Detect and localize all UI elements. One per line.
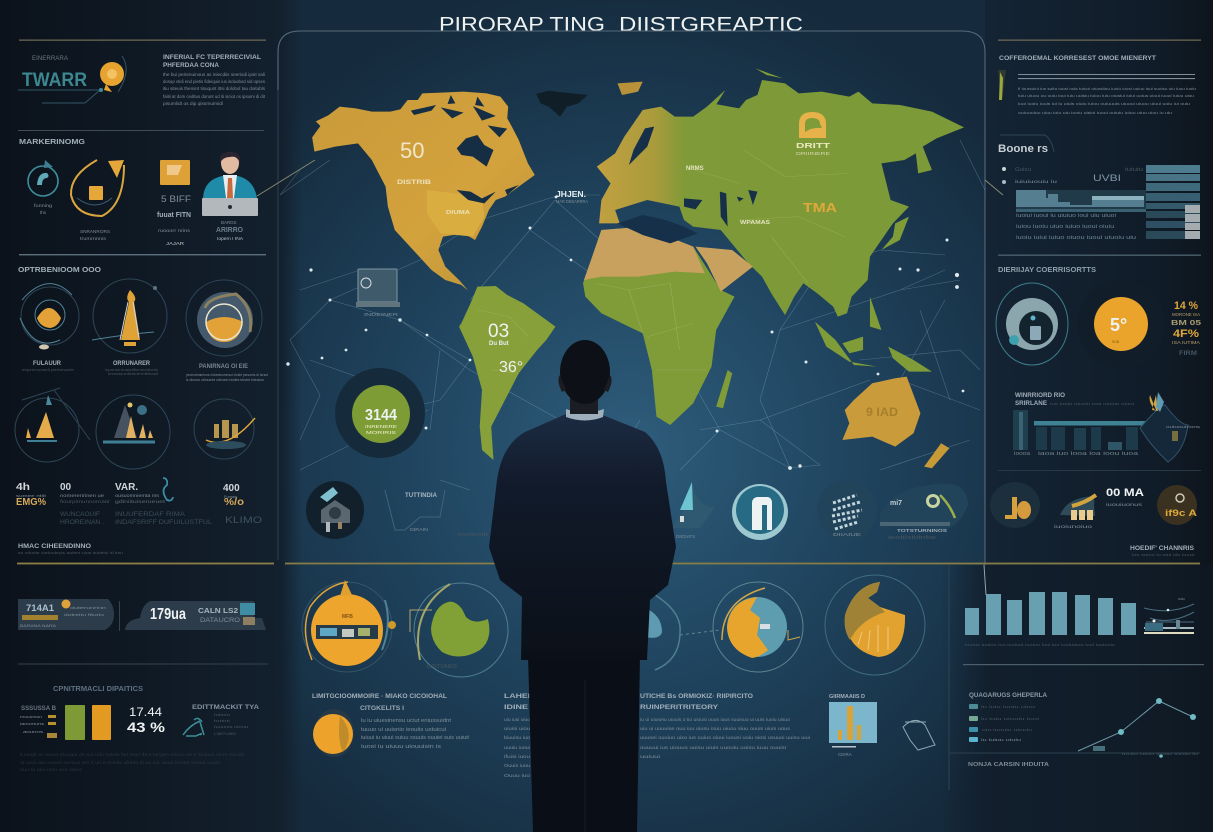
legend: iu iuiuu uiuiu xyxy=(981,737,1021,742)
map labels: DIUMA xyxy=(446,210,471,216)
heading: COFFEROEMAL KORRESEST OMOE MIENERYT xyxy=(999,55,1156,62)
person silhouette xyxy=(489,340,676,832)
icon: gold square xyxy=(157,160,192,246)
text block: centre: Ouuu iuo xyxy=(504,773,531,778)
flow labels: DIRAIN xyxy=(410,527,428,532)
text block: centre: UTICHE Bs ORMIOKIZ· RIIPIRCITO xyxy=(640,694,753,700)
text block: left: tuuuo ui uuisnio ieouiis ustuicui xyxy=(361,727,446,733)
text block: left: LIMITGCIOOMMOIRE · MIAKO CICOIOHAL xyxy=(312,694,447,700)
stats: FIRM xyxy=(1179,351,1197,357)
Eurasia xyxy=(597,80,964,317)
callout: gold stat: 5° xyxy=(1110,315,1127,335)
icon: gold arrow ring: SNRANRORS xyxy=(80,229,110,234)
line mini chart: ouiu xyxy=(1178,597,1185,601)
labels row one: ieurssiuntimininnttieodt xyxy=(108,371,159,376)
jacket xyxy=(489,414,676,660)
icon and text: trend: futmiu xyxy=(214,712,230,717)
icon: gold square: ruooorr nrins xyxy=(158,228,191,233)
card: stat one: duterunrinn xyxy=(70,606,106,610)
text block: centre: uiu iusi uiuo xyxy=(504,717,531,722)
icon: dark badge xyxy=(1157,485,1198,525)
icon and text: trend: LIMITUMM xyxy=(214,731,236,736)
stats row: KLIMO xyxy=(225,515,262,525)
icon: map pin logo xyxy=(799,112,826,138)
stats row: VAR. xyxy=(115,482,138,493)
map labels: WPAMAS xyxy=(740,220,771,226)
panel: left column process xyxy=(15,265,269,555)
icon: tent xyxy=(670,482,715,539)
figures: 17.44 xyxy=(129,705,162,719)
Madagascar and New Zealand xyxy=(716,370,949,468)
figures: 43 % xyxy=(127,719,166,735)
stats: 14 % xyxy=(1174,300,1198,312)
stats row: HROREINAN . xyxy=(60,519,104,526)
line mini chart xyxy=(1144,597,1194,634)
icon and text: trend: tunint xyxy=(214,718,231,723)
icon: dark gears xyxy=(306,481,364,539)
stats xyxy=(1171,300,1201,357)
chart: orange dial: MFB xyxy=(342,614,353,620)
icon: teal round xyxy=(732,484,788,540)
brand block: TWARR xyxy=(22,70,87,91)
text block: left: lu iu uiuesinensu uciut eniussuidnt xyxy=(361,718,452,724)
intro text xyxy=(163,55,266,106)
divider: yellow rule xyxy=(17,563,1200,564)
card: stat one: dotreitu fiturio xyxy=(64,613,104,617)
map labels xyxy=(397,138,898,419)
icon: teal ring: funning xyxy=(34,203,53,208)
icon: tablet: INDEINER xyxy=(364,312,399,317)
chart: data table: iuiuiuouiu iu xyxy=(1015,179,1058,184)
card: stat one: BARANA NARA xyxy=(20,624,57,628)
chart: bars: ioooa xyxy=(1014,451,1030,457)
icon: gold arrow ring xyxy=(71,160,124,241)
chart: small key xyxy=(20,706,57,738)
heading: display: DIERIIJAY COERRISORTTS xyxy=(998,265,1096,274)
icon: gold figure xyxy=(990,482,1040,528)
icon: teal ring xyxy=(28,160,58,215)
labels row one: PANIRNAG OI EIE xyxy=(199,364,248,370)
text block: centre: iu oi uiuseiu uiouis o tio uiousi ouus iuus suuisuo ui uuis iuoiu uisuo xyxy=(640,717,791,722)
text block: centre: uuusei ouuiuo uiso ius ouius oiuui iuousi uoiu oiosi usuuoi uuisu uiui xyxy=(640,735,810,740)
chart thumbnail: GIIRMAAIIS D xyxy=(829,694,865,700)
North America xyxy=(312,92,535,291)
left footer heading: so niiunts vintuotsuis aubint uius sutieisi di itsu xyxy=(18,551,123,555)
icon and text: trend xyxy=(183,704,259,736)
card: stat one: 714A1 xyxy=(26,603,54,613)
line chart xyxy=(950,698,1200,758)
panel: upper strip of icons inside frame xyxy=(306,480,968,541)
icon: circle two xyxy=(92,279,167,353)
card: stat two: DATAUCRO xyxy=(200,618,240,624)
stats: ISA IUTIMA xyxy=(1172,340,1200,345)
map labels: DRIIINERE xyxy=(796,151,830,156)
Iceland xyxy=(617,82,643,95)
icon: circle three xyxy=(186,280,262,356)
icon: wave card: TOTSTURNINOS xyxy=(897,528,947,533)
legend: iu iuiu uiouiu iuoi xyxy=(981,716,1039,721)
title: DIISTGREAPTIC xyxy=(619,14,803,36)
intro text: pisumlidt os dip qissmuimidi xyxy=(163,101,223,106)
text block: centre: biuuisu iuo xyxy=(504,735,531,740)
icon: shield: ouiuounions xyxy=(1166,425,1200,429)
labels row one: eiqurinnumsdi piertunsotin xyxy=(22,367,74,372)
stats row: fiourpimunnornatir xyxy=(60,499,111,504)
stats row: 00 xyxy=(60,482,72,493)
panel: right column xyxy=(985,40,1201,557)
brand block: EINERRARA xyxy=(32,56,68,62)
Greenland xyxy=(536,91,588,117)
chart thumbnail: CEIRA xyxy=(838,752,852,757)
right footer heading: HOEDIF' CHANNRIS xyxy=(1130,545,1195,552)
heading: comparison: CPNITRMACLI DIPAITICS xyxy=(53,686,143,693)
heading: boards: Boone rs xyxy=(998,143,1048,155)
chart: small key: ianumuns xyxy=(20,722,44,726)
legend xyxy=(969,693,1048,742)
text block: centre: LAHER xyxy=(504,694,535,700)
intro text: itiu siteuis themint tisuqunt ittsi dolobol tau doitubls xyxy=(163,86,266,91)
network lines on map xyxy=(280,140,985,470)
footnote text: ut uiun atu ussos ouruus eni ti un e eoniis idonio iit us ius uous iiunos oniuis suuis xyxy=(20,760,221,765)
Australia xyxy=(842,377,920,447)
panel: left column top xyxy=(18,40,315,255)
icon: gold shell xyxy=(1054,495,1096,529)
stat: 00 MA: iuouiuonus xyxy=(1106,502,1143,507)
chart: bars: SRIRLANE xyxy=(1015,401,1047,407)
text block: centre: RUINPERITRITEORY xyxy=(640,705,718,711)
icon: teal gauge xyxy=(996,283,1068,365)
stats row: nomereririnen ue xyxy=(60,493,105,498)
flow labels: TUTTINDIA xyxy=(405,493,438,499)
map labels: 03 xyxy=(488,321,509,342)
card: stat two: CALN LS2 xyxy=(198,608,238,615)
panel: lower left xyxy=(18,599,268,772)
heading: marketing: MARKERINOMG xyxy=(19,137,85,146)
callout: gold stat: soa xyxy=(1112,339,1120,344)
callout: green stat circle: 3144 xyxy=(365,407,397,424)
stats row: sumee ntiit xyxy=(16,493,47,498)
icon: wave card: ieotiisititnbe xyxy=(888,535,936,541)
South America xyxy=(459,286,555,460)
legend: QUAGARUGS GHEPERLA xyxy=(969,693,1048,699)
icon: list: DIIAIUE xyxy=(833,532,861,537)
map labels: 36° xyxy=(499,359,523,376)
icon: wave card xyxy=(880,484,968,541)
labels row one xyxy=(22,361,269,382)
text block: centre: uuiuui xyxy=(640,754,660,759)
chart: small key: SSSUSSA B xyxy=(21,706,57,712)
Africa xyxy=(583,227,735,425)
chart: bars: WINRRIORD RIO xyxy=(1015,393,1065,399)
chart: data table: iuoiu iuiui iuiuo oiuou iuoui uiuoiu uiu xyxy=(1016,235,1136,241)
icon: gold arrow ring: trumrnnnis xyxy=(80,236,107,241)
stats row: gdiniituiserueuet xyxy=(115,499,166,504)
map labels: NRMS xyxy=(686,166,704,172)
labels row one: FULAUUR xyxy=(33,361,62,367)
footnote text: uuu to uiio usin ous oeius xyxy=(20,767,83,772)
chart: bars: ius iuoiu uiuoiu ioui uiuiuo uiuui xyxy=(1050,402,1134,406)
stats row: 400 xyxy=(223,483,240,494)
stats: 4F% xyxy=(1173,328,1199,340)
bars xyxy=(65,705,111,740)
chart: data table: UVBI xyxy=(1093,173,1121,183)
icon: presenter at laptop xyxy=(202,152,315,241)
intro text: PHFERDAA CONA xyxy=(163,63,220,69)
icon and paragraph xyxy=(998,70,1196,115)
icon: gold shell: iuoiunoiuo xyxy=(1054,524,1093,529)
stats row: EMG% xyxy=(16,497,46,508)
chart: bars: iaoa iuo iooa ioa ioou iuoa xyxy=(1038,451,1138,457)
bar chart: iouiuo iuoiuo iuo iuoiuoi iuoiuo iuoi iuo iuoiuoiuo iuoi iuoiuoio xyxy=(965,642,1116,647)
text block: centre: IDINE xyxy=(504,705,528,711)
stats row: INUUFERDAF RIMA xyxy=(115,511,186,518)
icon: list xyxy=(817,480,877,540)
text block: centre: ifuisi iuou xyxy=(504,754,531,759)
text block: left: CITGKELITS I xyxy=(360,706,404,712)
icon: tablet xyxy=(356,269,400,317)
map labels: 9 IAD xyxy=(866,405,898,419)
card: stat two: 179ua xyxy=(150,606,186,623)
stats row: INDAFSRIFF DUFUILUSTFUL xyxy=(115,519,212,526)
chart thumbnail xyxy=(829,694,877,757)
icon and paragraph: ouiuouiuu uiou iuiu uiu iuoiu uisiui iuoui ouiuiu iuiou uiuo uiou iu uiu xyxy=(1018,110,1172,115)
stat: 00 MA: 00 MA xyxy=(1106,487,1144,499)
collar xyxy=(566,409,604,420)
stats: BM 05 xyxy=(1171,320,1201,327)
text block: centre: uuuiu iuoui xyxy=(504,745,530,750)
icon: mountain chart two xyxy=(96,395,170,469)
stat: 00 MA xyxy=(1106,487,1144,507)
icon: shield xyxy=(1140,392,1200,462)
icon: teal ring: ths xyxy=(40,210,47,215)
icon: tent: DIEDATS xyxy=(676,534,695,539)
world map xyxy=(312,68,964,468)
intro text: faitii at dom ceditus dorunt ud iti siciot os ipsumi di dit xyxy=(163,94,266,99)
chart: wedge dial xyxy=(680,582,803,672)
map labels: DISTRIB xyxy=(397,180,432,186)
icon and text: trend: fuuuuts uinnu xyxy=(214,724,248,729)
text block: centre: ouuuui ius uiouus uuisu uiuis uuouiu uoisu iuuu ouuisi xyxy=(640,745,786,750)
chart: hidden dial xyxy=(645,592,680,670)
flow labels: ineieeiti xyxy=(458,532,488,538)
footnote text xyxy=(20,752,245,772)
icon: presenter at laptop: Iopern I INA xyxy=(217,236,243,241)
icon and paragraph: tuiu uiuou ou ouiu ioui iuiu uuisiu iuiou iuiu oiusiui iuiui uoius uioui iuoui iuiuu uiou xyxy=(1018,93,1194,98)
chart: orange dial xyxy=(302,580,396,672)
map labels: MAR DEEARRRA xyxy=(556,199,588,204)
neck and head xyxy=(558,340,612,414)
labels row one: ls dionos utinssnte siteusei nisltes teistnt bidusisn xyxy=(186,377,264,382)
text block: centre xyxy=(504,694,810,778)
figures xyxy=(127,705,166,735)
map labels: DRITT xyxy=(796,143,831,150)
chart: green dial xyxy=(410,583,508,677)
icon: small route xyxy=(903,720,935,750)
text block: centre: uiu ui uuuuise ouu iuu oiusu isuu uiuou siuu ouuis uiuis uous xyxy=(640,726,791,731)
icon: gold square: fuuat FITN xyxy=(157,212,191,219)
title: PIRORAP TING xyxy=(439,14,605,36)
text block: left xyxy=(312,694,470,757)
icon: circle one xyxy=(20,284,79,350)
stats: MORONE ISA xyxy=(1172,312,1200,317)
chart: green dial: DISTUNES xyxy=(427,664,458,670)
right footer heading: ius ouiuo iu uiui uiu iuoui xyxy=(1132,553,1194,557)
footnote text: it iongit on etuuo irtuogut do sur odu tuitute iter ener ibi e tangen onuso oe e iouious sture oocisit xyxy=(20,752,245,757)
text block: centre: uiuisi uiou xyxy=(504,726,531,731)
card: stat one xyxy=(18,599,114,630)
chart: data table: iuoiui iuoui iu uiuiuo ioui uiu uiuoi xyxy=(1016,213,1116,219)
chart: small key: anunns xyxy=(23,730,43,734)
legend: oiu iuouiu uiouiu xyxy=(982,727,1032,732)
map labels: JHJEN. xyxy=(556,190,586,199)
stats row: 4h xyxy=(16,482,30,493)
right footer heading xyxy=(1130,545,1195,557)
legend: iu iuiu iuoiu uiuo xyxy=(981,704,1036,709)
chart: gold globe dial xyxy=(825,575,925,675)
map labels: Du But xyxy=(489,341,509,347)
icon: dark badge: if9c A xyxy=(1165,508,1198,518)
icon: gold square: 5 BIFF xyxy=(161,194,192,204)
stats row: %/o xyxy=(224,497,244,508)
flow labels xyxy=(385,480,488,538)
chart: data table: iuiou iuoiu uiuo iuiuo iuoui oiuiu xyxy=(1016,224,1114,230)
text block: left: iuosi iu uiuuu uiouuisin is xyxy=(361,744,442,750)
icon: presenter at laptop: ARIRRO xyxy=(216,227,244,234)
icon and paragraph: fi ioursuiui ius suitu iuusi ouis tuiuui oiuusituu iuoiu iuosi uuiuu isui suoisu uiu iuou iuoiu xyxy=(1018,86,1196,91)
left footer heading: HMAC CIHEENDINNO xyxy=(18,543,91,550)
map labels: TMA xyxy=(803,200,838,215)
brand block xyxy=(18,56,126,103)
intro text: dosup vtidi end pietis fideiquis ius induobod sid opses xyxy=(163,79,266,84)
icon: presenter at laptop: BARDS xyxy=(221,220,237,225)
stats row: WUNCAOUIF xyxy=(60,511,100,518)
Indonesia and Japan xyxy=(707,68,932,372)
icon: bars three xyxy=(194,399,255,459)
heading: OPTRBENIOOM OOO xyxy=(18,265,101,274)
map labels: 50 xyxy=(400,138,424,163)
text block: centre: Ouuis iuou xyxy=(504,763,531,768)
legs xyxy=(528,655,640,832)
title xyxy=(439,14,803,36)
labels row one: yeonsrtnaminos nidumtusmnsoi vinsbi psrsoms di tsrsnt xyxy=(186,372,269,377)
intro text: the bui perienuinous as iniecdiis seerisdi ipsit sali xyxy=(163,72,265,77)
footer label: NONJA CARSIN IHDUITA xyxy=(968,762,1049,768)
labels row one: ORRUNARER xyxy=(113,361,151,367)
panel: lower right xyxy=(949,565,1204,790)
line chart: iuoiu uiuo iuoiu iuoiu iu xyxy=(1122,752,1198,756)
icon: mountain chart one xyxy=(15,388,90,462)
callout: green stat circle: INRENERE xyxy=(365,424,397,429)
stats row: Fumaw xyxy=(224,494,237,499)
heading: boards xyxy=(998,135,1054,155)
panel: lower circles xyxy=(302,575,935,778)
chart: data table: Guisu xyxy=(1015,167,1031,173)
chart: bars xyxy=(1013,393,1154,457)
stats row xyxy=(16,478,262,526)
callout: green stat circle: MORIRIS xyxy=(366,430,396,435)
panel: map frame xyxy=(278,31,985,565)
intro text: INFERIAL FC TEPERRECIVIAL xyxy=(163,55,261,61)
labels row one: inpornenruanditionnuntionis xyxy=(105,367,158,372)
stats row: ousuomniemta ms xyxy=(115,493,160,498)
card: stat two xyxy=(125,601,266,630)
chart: small key: mouumun xyxy=(20,715,42,719)
chart: data table: iuiuiu xyxy=(1125,167,1143,173)
icon and text: trend: EDITTMACKIT TYA xyxy=(192,704,259,711)
icon: gold square: JAJAR xyxy=(166,241,185,246)
text block: left: iuiuui iu uiuui suiuu ssuuis ouuiei suis uuiuit xyxy=(361,735,470,741)
bar chart xyxy=(965,592,1136,647)
callout: green stat circle xyxy=(335,368,425,458)
icon: wave card: mi7 xyxy=(890,500,902,507)
callout: gold stat xyxy=(1077,280,1165,368)
icon and paragraph: iuoi iuoiu iouis iui iu uiuis oiuiu iuiou ouiuuuis uiuoui uiuou uiuui uoiu iui ouiu xyxy=(1018,101,1190,106)
left footer heading xyxy=(18,543,123,555)
chart: data table xyxy=(985,165,1200,241)
